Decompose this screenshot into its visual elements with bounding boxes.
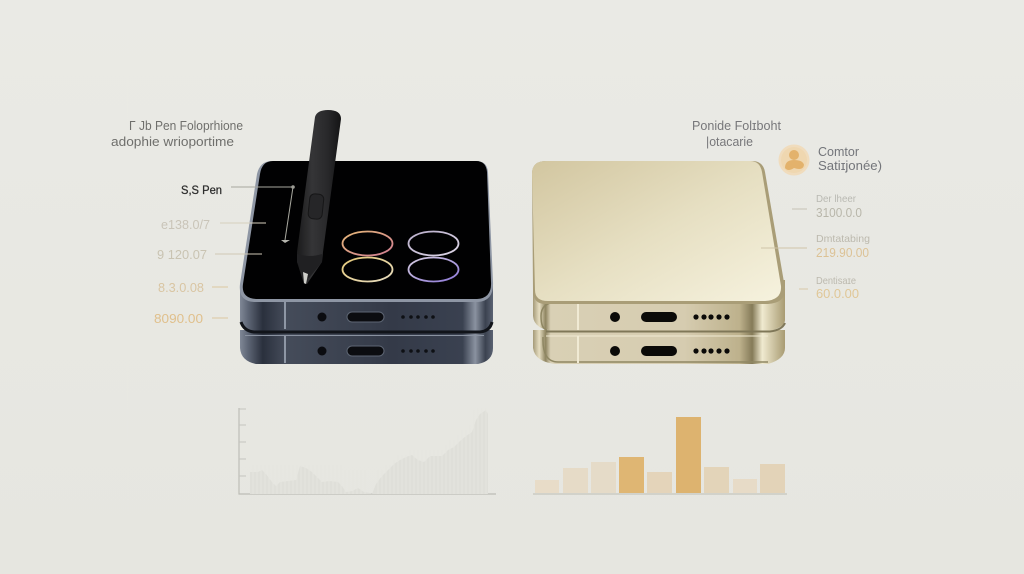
s pen callout: S,S Pen (181, 183, 222, 197)
left heading: adophie wrioportime (111, 134, 234, 149)
right heading: |otacarie (706, 134, 753, 149)
s pen stylus (297, 110, 341, 284)
left heading: Γ Jb Pen Foloprhione (129, 118, 243, 133)
right value labels: Dmtatabing (816, 233, 870, 245)
right value labels: 60.0.00 (816, 287, 859, 301)
gold ports lower (610, 346, 730, 356)
gold seam lines (577, 302, 579, 363)
left value labels: 8.3.0.08 (158, 280, 204, 295)
right heading (692, 118, 781, 149)
rings (342, 232, 458, 282)
s pen callout (181, 183, 295, 243)
left value labels (154, 217, 266, 326)
gold upper body (533, 280, 785, 331)
upper body (240, 285, 493, 331)
right value labels: 3100.0.0 (816, 206, 862, 220)
right value labels: 219.90.00 (816, 246, 869, 260)
customer label: Comtor (818, 144, 860, 159)
dark phone (240, 161, 493, 364)
ports upper (318, 312, 435, 322)
gold phone (532, 161, 785, 364)
gold ports upper (610, 312, 730, 322)
lower body (240, 330, 493, 364)
right value labels: Der lheer (816, 193, 856, 205)
right value labels (761, 193, 870, 301)
left value labels: 9 120.07 (157, 247, 207, 262)
left value labels: e138.0/7 (161, 217, 210, 232)
customer label: Satiɪjonée) (818, 158, 882, 173)
icon: customer badge (778, 144, 810, 176)
left value labels: 8090.00 (154, 311, 203, 326)
line-bar chart (239, 408, 496, 494)
customer label (818, 144, 882, 173)
right heading: Ponide Folɪboht (692, 118, 781, 133)
bar chart (533, 417, 787, 494)
seam lines (284, 302, 286, 363)
screen (240, 161, 493, 302)
gold lower body (533, 330, 785, 364)
ports lower (318, 346, 435, 356)
left heading (111, 118, 243, 149)
gold top face (532, 161, 785, 304)
right value labels: Dentisaɪe (816, 275, 856, 287)
